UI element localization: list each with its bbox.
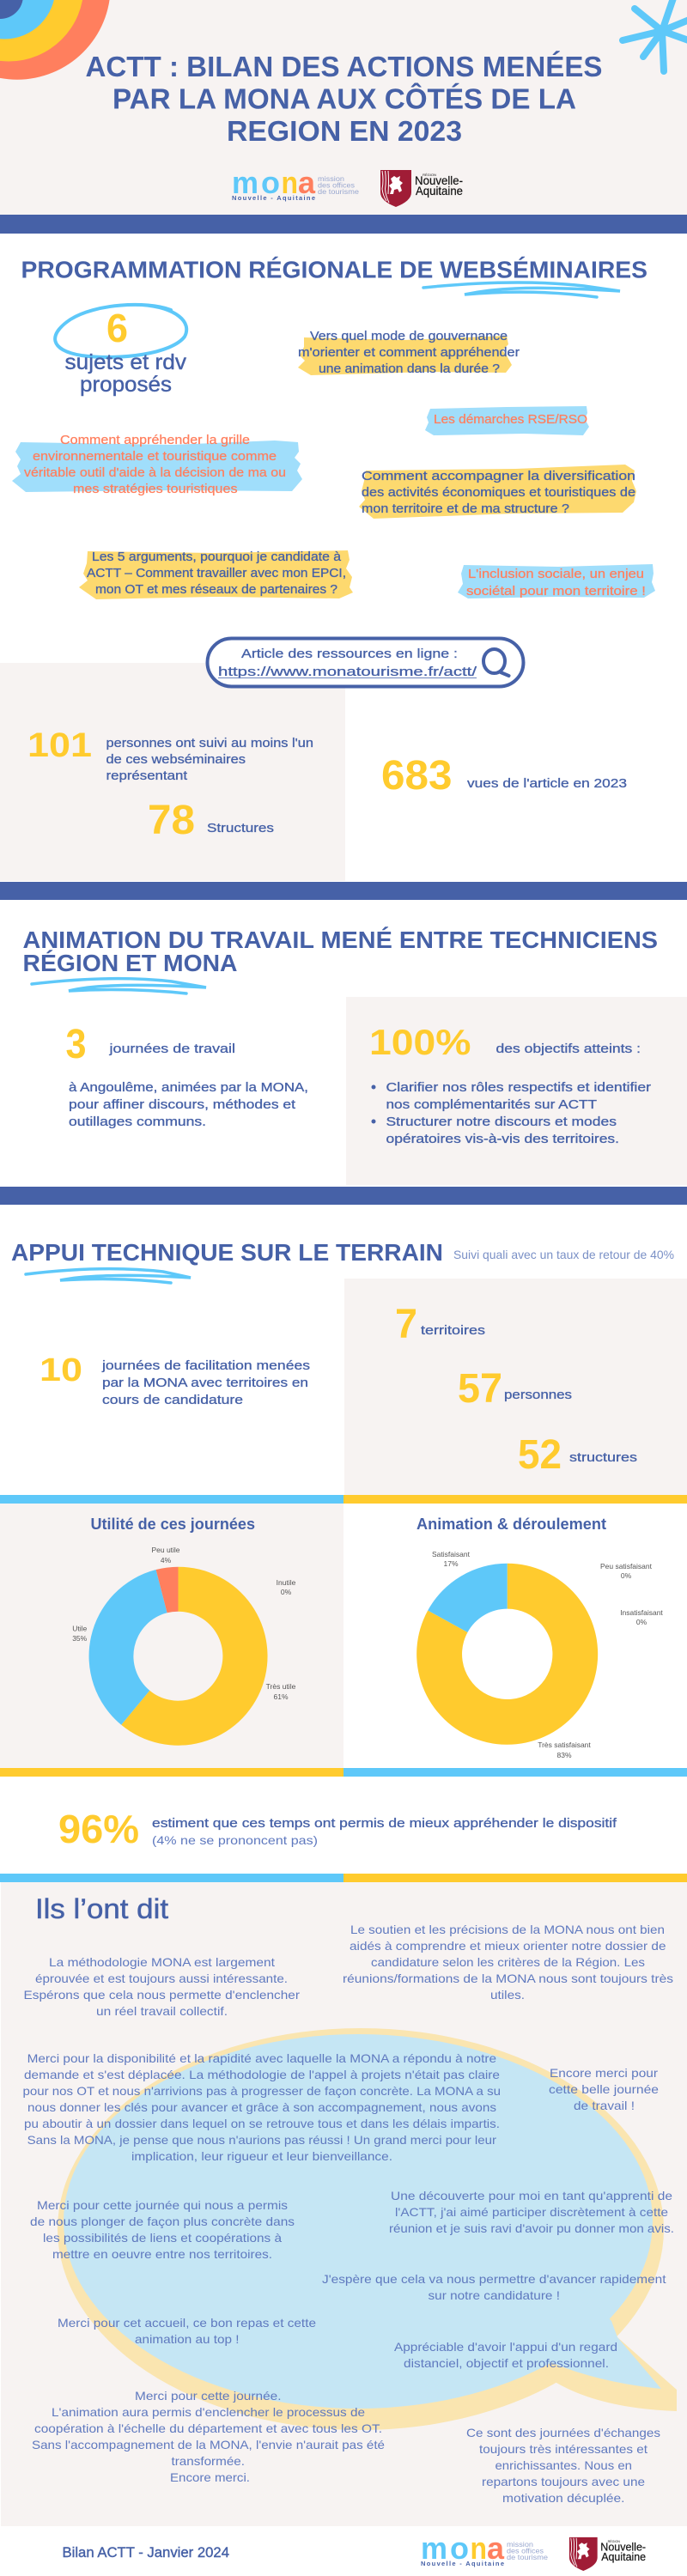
stat: 3 journées bbox=[65, 1022, 308, 1129]
topic: 5 arguments: mon OT et mes réseaux de partenaires ? bbox=[95, 583, 337, 597]
stat: 10 journées: 10 bbox=[40, 1352, 82, 1388]
testimonial: découverte: Une découverte pour moi en tant qu'apprenti de bbox=[391, 2189, 672, 2202]
logo: région footer bbox=[569, 2537, 646, 2571]
stat: 101 personnes: personnes ont suivi au moins l'un bbox=[106, 737, 313, 750]
testimonial: soutien et précisions: aidés à comprendre et mieux orienter notre dossier de bbox=[350, 1939, 666, 1953]
logo: région footer: RÉGION bbox=[608, 2539, 620, 2543]
testimonial: échanges: motivation décuplée. bbox=[502, 2491, 625, 2505]
stat: 78 structures bbox=[148, 798, 274, 843]
callout: 6 sujets: proposés bbox=[80, 373, 172, 397]
testimonial: soutien et précisions: candidature selon les critères de la Région. Les bbox=[371, 1955, 645, 1969]
logo: mona: m bbox=[232, 165, 258, 200]
stat: 10 journées: journées de facilitation menées bbox=[101, 1359, 310, 1373]
testimonial: avancer: sur notre candidature ! bbox=[428, 2288, 560, 2302]
stat: 10 journées: cours de candidature bbox=[102, 1394, 243, 1407]
panel: chiffres terrain: 7 bbox=[395, 1302, 417, 1347]
chart labels: utilité: Peu utile bbox=[151, 1546, 180, 1554]
panel: utilité chart: Utilité de ces journées bbox=[91, 1516, 255, 1533]
testimonial: méthodologie: éprouvée et est toujours aussi intéressante. bbox=[35, 1971, 288, 1985]
testimonial: regard bbox=[394, 2340, 617, 2370]
testimonial: accueil: animation au top ! bbox=[135, 2332, 239, 2346]
chart labels: animation: 83% bbox=[556, 1751, 572, 1759]
testimonial: accueil bbox=[58, 2316, 316, 2346]
topic: diversification: Comment accompagner la diversification bbox=[362, 470, 635, 483]
stat: 683 vues: 683 bbox=[381, 753, 452, 799]
testimonial: coopération: Encore merci. bbox=[170, 2470, 250, 2484]
search pill: article link: https://www.monatourisme.fr/actt/ bbox=[218, 665, 477, 679]
panel: chiffres terrain: 52 bbox=[518, 1432, 562, 1478]
topic: RSE bbox=[425, 406, 589, 435]
testimonial: coopération: transformée. bbox=[172, 2454, 245, 2468]
stat: 78 structures: Structures bbox=[207, 822, 274, 835]
panel: chiffres terrain: personnes bbox=[504, 1388, 572, 1402]
panel: 100% objectifs bbox=[346, 997, 687, 1185]
testimonial: coopération: coopération à l'échelle du département et avec tous les OT. bbox=[34, 2421, 382, 2435]
testimonial: échanges: toujours très intéressantes et bbox=[479, 2442, 647, 2456]
logo: mona footer: m bbox=[421, 2530, 447, 2566]
topic: RSE: Les démarches RSE/RSO bbox=[434, 413, 587, 427]
testimonial: échanges: repartons toujours avec une bbox=[482, 2475, 645, 2488]
testimonial: échanges: enrichissantes. Nous en bbox=[495, 2458, 632, 2472]
topic: diversification: mon territoire et de ma structure ? bbox=[362, 502, 569, 516]
testimonial: plonger bbox=[30, 2198, 295, 2261]
logo: région Nouvelle-Aquitaine: Nouvelle- bbox=[415, 173, 463, 187]
testimonial: méthodologie bbox=[24, 1955, 300, 2018]
testimonial: plonger: de nous plonger de façon plus concrète dans bbox=[30, 2215, 295, 2228]
topic: grille environnementale: environnementale et touristique comme bbox=[33, 450, 277, 464]
testimonial: disponibilité: implication, leur rigueur et leur bienveillance. bbox=[131, 2149, 392, 2163]
topic: inclusion sociale: L'inclusion sociale, un enjeu bbox=[468, 568, 644, 581]
stat: 78 structures: 78 bbox=[148, 798, 195, 843]
logo: mona: n bbox=[282, 165, 298, 200]
icon: rainbow bbox=[0, 0, 111, 80]
chart labels: animation: 0% bbox=[636, 1618, 647, 1626]
icon: blue star bbox=[623, 0, 687, 71]
topic: diversification bbox=[359, 465, 636, 519]
chart labels: utilité: Inutile bbox=[277, 1578, 296, 1587]
chart labels: animation: Très satisfaisant bbox=[538, 1741, 591, 1749]
chart labels: animation: Peu satisfaisant bbox=[600, 1562, 653, 1571]
logo: mona: a bbox=[298, 165, 316, 200]
topic: grille environnementale: Comment appréhender la grille bbox=[60, 434, 250, 447]
logo: mona footer: n bbox=[471, 2530, 487, 2566]
testimonial: disponibilité: demande et s'est déplacée. La méthodologie de l'appel à projets n'était pas claire bbox=[24, 2068, 500, 2081]
heading: programmation régionale: PROGRAMMATION RÉGIONALE DE WEBSÉMINAIRES bbox=[21, 256, 647, 283]
testimonial: soutien et précisions bbox=[343, 1923, 673, 2002]
title: ACTT : BILAN DES ACTIONS MENÉES bbox=[86, 51, 603, 82]
chart labels: animation: Insatisfaisant bbox=[620, 1608, 663, 1617]
footer date: Bilan ACTT - Janvier 2024 bbox=[62, 2544, 229, 2561]
callout: 6 sujets: 6 bbox=[106, 306, 128, 350]
callout: 6 sujets: sujets et rdv bbox=[65, 350, 187, 374]
testimonial: disponibilité: pu aboutir à un dossier dans lequel on se retrouve tous et dans les délais impartis. bbox=[24, 2117, 500, 2130]
footer bbox=[62, 2530, 646, 2571]
speech bubble bbox=[58, 2028, 677, 2430]
chart labels: animation: 0% bbox=[621, 1571, 632, 1580]
stat: 101 personnes: représentant bbox=[106, 769, 187, 783]
testimonial: coopération bbox=[32, 2389, 385, 2484]
search pill: article link: Article des ressources en ligne : bbox=[241, 647, 458, 661]
stat: 101 personnes bbox=[27, 726, 313, 783]
stat: 101 personnes: 101 bbox=[27, 726, 92, 764]
logo: mona footer: mission bbox=[507, 2540, 533, 2549]
logo: mona footer: des offices bbox=[507, 2547, 544, 2555]
panel: 100% objectifs: opératoires vis-à-vis des territoires. bbox=[386, 1133, 619, 1146]
stat: 3 journées: pour affiner discours, méthodes et bbox=[69, 1098, 295, 1112]
heading: animation du travail bbox=[22, 927, 658, 993]
testimonial: regard: Appréciable d'avoir l'appui d'un regard bbox=[394, 2340, 617, 2354]
logo: mona: o bbox=[261, 165, 280, 200]
topic: gouvernance: m'orienter et comment appréhender bbox=[298, 346, 520, 360]
logo: mona: mission bbox=[318, 174, 344, 183]
chart labels: animation: Satisfaisant bbox=[432, 1550, 471, 1558]
stat: 683 vues: vues de l'article en 2023 bbox=[467, 777, 627, 791]
icon: magnifier bbox=[483, 649, 508, 676]
chart labels: utilité: Utile bbox=[72, 1625, 87, 1633]
panel: 100% objectifs: Clarifier nos rôles respectifs et identifier bbox=[386, 1081, 651, 1095]
testimonial: plonger: les possibilités de liens et coopérations à bbox=[43, 2231, 282, 2245]
topic: gouvernance: une animation dans la durée ? bbox=[319, 362, 500, 376]
testimonial: disponibilité bbox=[22, 2051, 501, 2163]
heading: animation du travail: RÉGION ET MONA bbox=[22, 950, 237, 976]
testimonial: coopération: Merci pour cette journée. bbox=[135, 2389, 282, 2403]
topic: 5 arguments: ACTT – Comment travailler avec mon EPCI, bbox=[87, 567, 346, 580]
logo: région Nouvelle-Aquitaine: RÉGION bbox=[423, 173, 436, 177]
testimonial: découverte: réunion et je suis ravi d'avoir pu donner mon avis. bbox=[389, 2221, 674, 2235]
testimonial: soutien et précisions: utiles. bbox=[490, 1988, 525, 2002]
topic: 5 arguments: Les 5 arguments, pourquoi je candidate à bbox=[92, 550, 342, 564]
chart labels: animation bbox=[432, 1550, 663, 1759]
testimonial: soutien et précisions: Le soutien et les précisions de la MONA nous ont bien bbox=[350, 1923, 665, 1936]
chart labels: utilité: 61% bbox=[273, 1692, 289, 1701]
logo: mona: Nouvelle - Aquitaine bbox=[232, 194, 315, 202]
logo: mona footer: Nouvelle - Aquitaine bbox=[421, 2560, 504, 2567]
testimonial: plonger: mettre en oeuvre entre nos territoires. bbox=[52, 2247, 272, 2261]
donut chart: animation bbox=[416, 1564, 598, 1745]
testimonial: disponibilité: nous donner les clés pour avancer et grâce à son accompagnement, nous avons bbox=[27, 2100, 496, 2114]
stat: 10 journées: par la MONA avec territoires en bbox=[102, 1376, 308, 1390]
testimonial: accueil: Merci pour cet accueil, ce bon repas et cette bbox=[58, 2316, 316, 2330]
heading: animation du travail: ANIMATION DU TRAVAIL MENÉ ENTRE TECHNICIENS bbox=[22, 927, 658, 953]
heading: appui technique: Suivi quali avec un taux de retour de 40% bbox=[453, 1248, 674, 1261]
panel: utilité chart bbox=[0, 1504, 344, 1768]
logo: région Nouvelle-Aquitaine: Aquitaine bbox=[416, 184, 463, 197]
topic: gouvernance: Vers quel mode de gouvernance bbox=[310, 330, 508, 343]
heading: programmation régionale bbox=[21, 256, 647, 297]
testimonial: méthodologie: un réel travail collectif. bbox=[96, 2004, 228, 2018]
testimonial: regard: distanciel, objectif et professionnel. bbox=[404, 2356, 609, 2370]
topic: grille environnementale: véritable outil d'aide à la décision de ma ou bbox=[24, 466, 286, 480]
logo: région footer: Aquitaine bbox=[601, 2550, 646, 2563]
search pill: article link bbox=[208, 639, 524, 687]
chart labels: utilité: 35% bbox=[72, 1634, 88, 1643]
stat: 3 journées: à Angoulême, animées par la MONA, bbox=[69, 1081, 308, 1095]
testimonial: coopération: L'animation aura permis d'enclencher le processus de bbox=[52, 2405, 365, 2419]
panel: chiffres terrain: territoires bbox=[421, 1324, 485, 1338]
logo: région Nouvelle-Aquitaine bbox=[380, 170, 463, 207]
testimonial: découverte: l'ACTT, j'ai aimé participer discrètement à cette bbox=[395, 2205, 668, 2219]
callout: 6 sujets bbox=[55, 305, 187, 397]
stat: 3 journées: journées de travail bbox=[108, 1042, 235, 1056]
heading: appui technique: APPUI TECHNIQUE SUR LE TERRAIN bbox=[11, 1239, 443, 1266]
topic: grille environnementale bbox=[12, 434, 302, 496]
testimonial: avancer bbox=[322, 2272, 666, 2302]
testimonial: plonger: Merci pour cette journée qui nous a permis bbox=[37, 2198, 288, 2212]
heading: appui technique bbox=[11, 1239, 674, 1283]
testimonial: découverte bbox=[389, 2189, 674, 2235]
testimonial: méthodologie: Espérons que cela nous permette d'enclencher bbox=[24, 1988, 300, 2002]
panel: chiffres terrain: structures bbox=[569, 1451, 637, 1465]
panel: chiffres terrain bbox=[344, 1279, 687, 1495]
testimonial: encore merci bbox=[549, 2066, 659, 2112]
topic: grille environnementale: mes stratégies touristiques bbox=[73, 483, 237, 496]
logo: région footer: Nouvelle- bbox=[600, 2540, 646, 2553]
logo: mona: des offices bbox=[318, 180, 355, 189]
title: REGION EN 2023 bbox=[227, 115, 462, 147]
donut chart: utilité bbox=[89, 1567, 268, 1746]
stat: 96%: 96% bbox=[58, 1807, 139, 1851]
stat: 3 journées: outillages communs. bbox=[69, 1115, 206, 1129]
stat: 10 journées bbox=[40, 1352, 310, 1407]
stat: 3 journées: 3 bbox=[65, 1022, 86, 1067]
panel: animation chart bbox=[416, 1516, 663, 1759]
testimonial: disponibilité: pour nos OT et nous n'arrivions pas à progresser de façon concrète. La MONA a su bbox=[22, 2084, 501, 2098]
title: PAR LA MONA AUX CÔTÉS DE LA bbox=[112, 82, 576, 115]
testimonial: échanges bbox=[466, 2426, 660, 2505]
stat: 101 personnes: de ces webséminaires bbox=[106, 753, 246, 767]
testimonial: disponibilité: Merci pour la disponibilité et la rapidité avec laquelle la MONA a répondu à notre bbox=[27, 2051, 496, 2065]
chart labels: utilité: 4% bbox=[161, 1556, 172, 1564]
topic: inclusion sociale bbox=[458, 564, 655, 598]
panel: chiffres terrain: 57 bbox=[458, 1366, 502, 1412]
logo: mona footer: o bbox=[450, 2530, 469, 2566]
title bbox=[86, 51, 603, 147]
panel: 100% objectifs: 100% bbox=[369, 1022, 471, 1062]
testimonial: encore merci: cette belle journée bbox=[549, 2082, 659, 2096]
testimonial: échanges: Ce sont des journées d'échanges bbox=[466, 2426, 660, 2439]
icon: hand-drawn circle bbox=[55, 305, 186, 357]
testimonial: disponibilité: Sans la MONA, je pense que nous n'aurions pas réussi ! Un grand merci pour leur bbox=[27, 2133, 496, 2147]
panel: 100% objectifs: nos complémentarités sur ACTT bbox=[386, 1098, 597, 1112]
topic: 5 arguments bbox=[79, 550, 353, 599]
panel: header bbox=[0, 0, 687, 215]
logo: mona footer: de tourisme bbox=[507, 2553, 548, 2561]
testimonial: encore merci: Encore merci pour bbox=[550, 2066, 658, 2080]
logo: mona footer bbox=[421, 2530, 548, 2567]
testimonial: soutien et précisions: réunions/formations de la MONA nous sont toujours très bbox=[343, 1971, 673, 1985]
logo: mona bbox=[232, 165, 359, 202]
stat: 96%: estiment que ces temps ont permis de mieux appréhender le dispositif bbox=[152, 1817, 617, 1831]
testimonial: avancer: J'espère que cela va nous permettre d'avancer rapidement bbox=[322, 2272, 666, 2286]
topic: diversification: des activités économiques et touristiques de bbox=[362, 486, 635, 500]
panel: 100% objectifs: des objectifs atteints : bbox=[496, 1042, 641, 1056]
testimonial: coopération: Sans l'accompagnement de la MONA, l'envie n'aurait pas été bbox=[32, 2438, 385, 2451]
panel: animation chart: Animation & déroulement bbox=[416, 1516, 606, 1533]
logo: mona footer: a bbox=[487, 2530, 505, 2566]
topic: gouvernance bbox=[298, 330, 520, 376]
panel: 100% objectifs: Structurer notre discours et modes bbox=[386, 1115, 617, 1129]
chart labels: animation: 17% bbox=[443, 1559, 459, 1568]
chart labels: utilité: 0% bbox=[281, 1588, 292, 1596]
topic: inclusion sociale: sociétal pour mon territoire ! bbox=[466, 585, 646, 598]
chart labels: utilité bbox=[72, 1546, 296, 1701]
stat: 96% bbox=[58, 1807, 617, 1851]
testimonial: encore merci: de travail ! bbox=[574, 2099, 635, 2112]
chart labels: utilité: Très utile bbox=[266, 1682, 296, 1691]
heading: ils l'ont dit: Ils l’ont dit bbox=[35, 1893, 168, 1924]
stat: 96%: (4% ne se prononcent pas) bbox=[152, 1833, 318, 1847]
testimonial: méthodologie: La méthodologie MONA est largement bbox=[49, 1955, 275, 1969]
stat: 683 vues bbox=[381, 753, 627, 799]
panel: témoignages bbox=[1, 1882, 687, 2526]
logo: mona: de tourisme bbox=[318, 187, 359, 196]
panel: statistiques webséminaires bbox=[0, 663, 345, 881]
